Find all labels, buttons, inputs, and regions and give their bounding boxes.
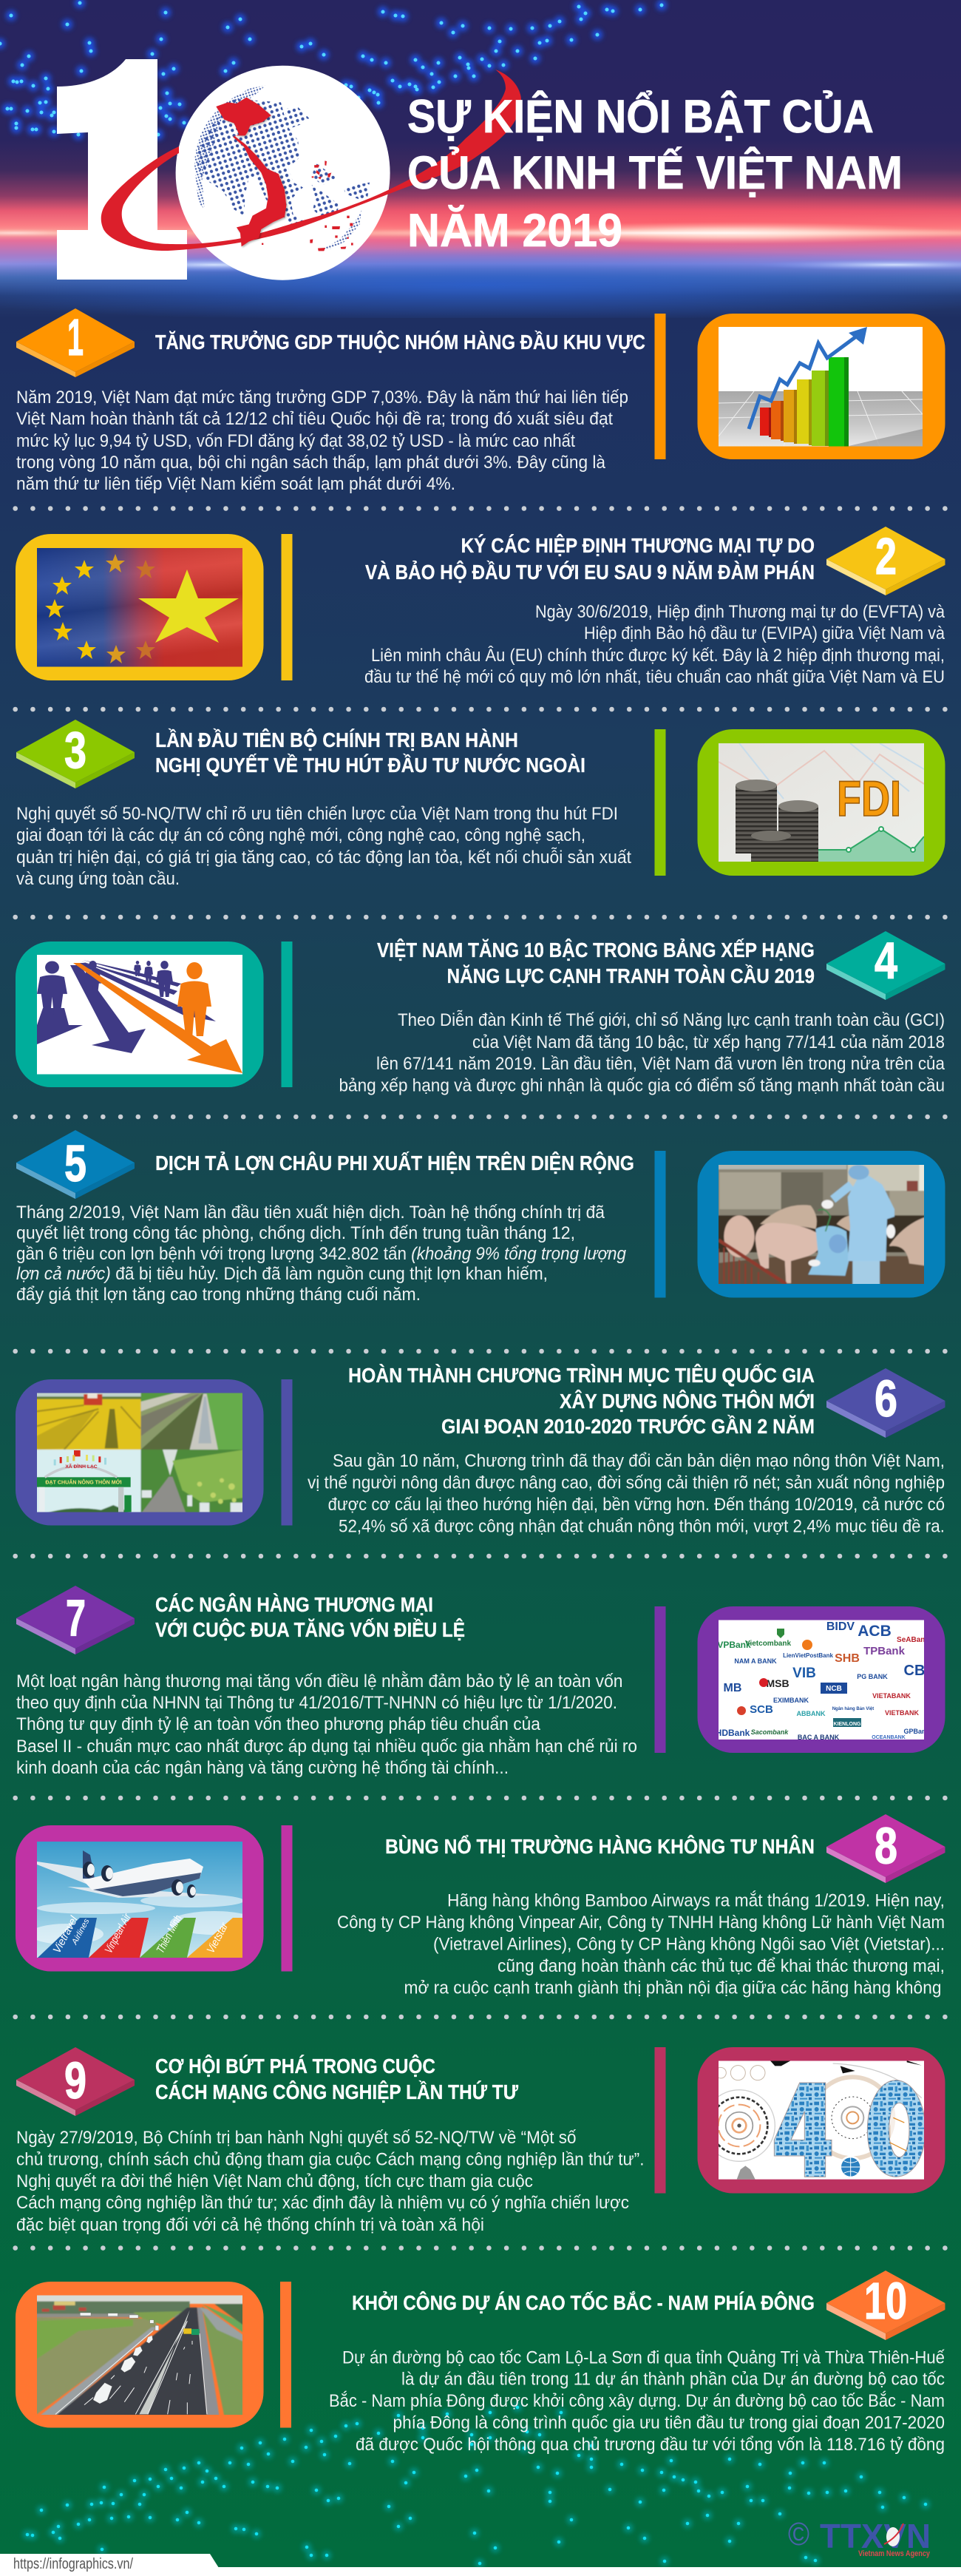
image card: bank logos: TPBank	[863, 1645, 906, 1657]
image card: bank logos: ACB	[858, 1623, 892, 1640]
image card: bank logos: NAM A BANK	[734, 1657, 777, 1665]
heading 7	[155, 1593, 465, 1641]
decoration: glowing blue dots top	[0, 3, 662, 135]
body text 8	[337, 1891, 945, 1998]
body text 9: Nghị quyết ra đời thể hiện Việt Nam chủ động, tích cực tham gia cuộc	[16, 2171, 533, 2191]
image card: growth chart	[698, 314, 945, 459]
image card: expressway	[16, 2282, 263, 2427]
body text 2	[364, 602, 945, 687]
big numeral 1	[57, 59, 187, 280]
heading 4: VIỆT NAM TĂNG 10 BẬC TRONG BẢNG XẾP HẠNG	[377, 938, 815, 961]
title: SỰ KIỆN NỔI BẬT CỦA	[407, 90, 874, 143]
badge 1: 1	[67, 308, 84, 366]
image card: bank logos: KIENLONG	[834, 1722, 861, 1727]
heading 4: NĂNG LỰC CẠNH TRANH TOÀN CẦU 2019	[446, 964, 815, 987]
image card: FDI coins: FDI	[837, 771, 901, 827]
header background	[0, 0, 961, 322]
body text 10	[329, 2347, 945, 2455]
body text 7: kinh doanh của các ngân hàng và tăng cường hệ thống tài chính...	[16, 1758, 509, 1778]
image card: rural development collage: ĐẠT CHUẨN NÔNG THÔN MỚI	[45, 1478, 122, 1485]
badge 2: 2	[875, 527, 897, 585]
heading 6: GIAI ĐOẠN 2010-2020 TRƯỚC GẦN 2 NĂM	[441, 1415, 815, 1438]
image card: arrows and people	[16, 942, 263, 1087]
image card: bank logos: Sacombank	[751, 1728, 789, 1736]
heading 6	[348, 1363, 815, 1438]
body text 1: năm thứ tư liên tiếp Việt Nam kiểm soát lạm phát dưới 4%.	[16, 474, 455, 494]
image card: airplane and tail fins: Vinpearl Air	[103, 1911, 134, 1955]
image card: bank logos: HDBank	[716, 1728, 750, 1738]
body text 5: gần 6 triệu con lợn bệnh với trọng lượng 342.802 tấn (khoảng 9% tổng trọng lượng	[16, 1244, 627, 1264]
heading 9	[155, 2054, 519, 2103]
badge 7	[16, 1586, 135, 1654]
body text 5: đẩy giá thịt lợn tăng cao trong những tháng cuối năm.	[16, 1285, 421, 1305]
badge 3	[16, 720, 135, 788]
heading 5: DỊCH TẢ LỢN CHÂU PHI XUẤT HIỆN TRÊN DIỆN RỘNG	[155, 1151, 634, 1174]
body text 9: Cách mạng công nghiệp lần thứ tư; xác định đây là nhiệm vụ có ý nghĩa chiến lược	[16, 2193, 629, 2213]
image card: rural development collage: XÃ ĐÌNH LẠC	[65, 1463, 98, 1470]
image card: bank logos: SHB	[835, 1652, 860, 1665]
heading 2: VÀ BẢO HỘ ĐẦU TƯ VỚI EU SAU 9 NĂM ĐÀM PHÁN	[365, 560, 815, 584]
heading 7: VỚI CUỘC ĐUA TĂNG VỐN ĐIỀU LỆ	[155, 1617, 465, 1641]
badge 4: 4	[875, 932, 897, 990]
decorative dotted separators	[16, 509, 948, 2248]
heading 7: CÁC NGÂN HÀNG THƯƠNG MẠI	[155, 1593, 433, 1616]
badge 4	[826, 931, 945, 1000]
badge 8	[826, 1814, 945, 1883]
image card: bank logos: SeABank	[897, 1636, 929, 1644]
image card: bank logos	[698, 1606, 945, 1753]
body text 1: Năm 2019, Việt Nam đạt mức tăng trưởng GDP 7,03%. Đây là năm thứ hai liên tiếp	[16, 388, 628, 408]
image card: airplane and tail fins	[16, 1825, 263, 1972]
badge 5	[16, 1130, 135, 1199]
image card: airplane and tail fins: Airlines	[70, 1917, 92, 1947]
heading 6: HOÀN THÀNH CHƯƠNG TRÌNH MỤC TIÊU QUỐC GIA	[348, 1363, 815, 1387]
red orbit swoosh	[101, 70, 521, 251]
badge 6: 6	[875, 1370, 897, 1427]
badge 8: 8	[875, 1816, 897, 1874]
badge 10	[826, 2271, 945, 2340]
body text 1: mức kỷ lục 9,94 tỷ USD, vốn FDI đăng ký đạt 38,02 tỷ USD - là mức cao nhất	[16, 431, 575, 451]
body text 1: trong vòng 10 năm qua, bội chi ngân sách thấp, lạm phát dưới 3%. Đây cũng là	[16, 453, 606, 473]
badge 5: 5	[64, 1135, 86, 1192]
body text 7	[16, 1671, 637, 1778]
panel: event 9 fourth industrial revolution	[16, 2047, 945, 2235]
heading 6: XÂY DỰNG NÔNG THÔN MỚI	[560, 1389, 815, 1413]
heading 4	[377, 938, 815, 987]
image card: bank logos: CB	[904, 1663, 925, 1679]
footer strip	[0, 2554, 961, 2576]
badge 9: 9	[64, 2052, 86, 2109]
body text 7: theo quy định của NHNN tại Thông tư 41/2016/TT-NHNN có hiệu lực từ 1/1/2020.	[16, 1693, 617, 1713]
logo: TTXVN Vietnam News Agency: ©	[788, 2516, 809, 2552]
image card: bank logos: LienVietPostBank	[783, 1652, 833, 1659]
image card: bank logos: VIB	[792, 1666, 816, 1681]
image card: airplane and tail fins: Vietstar	[205, 1920, 231, 1955]
body text 7: Một loạt ngân hàng thương mại tăng vốn điều lệ nhằm đảm bảo tỷ lệ an toàn vốn	[16, 1671, 622, 1691]
logo: TTXVN Vietnam News Agency: TTXVN	[820, 2517, 931, 2555]
body text 7: Thông tư quy định tỷ lệ an toàn vốn theo phương pháp tiêu chuẩn của	[16, 1714, 541, 1734]
body text 10: phía Đông là công trình quốc gia ưu tiên đầu tư trong giai đoạn 2017-2020	[393, 2413, 945, 2433]
globe as numeral 0	[176, 66, 390, 280]
body text 1	[16, 388, 628, 494]
badge 3: 3	[64, 721, 86, 779]
badge 2	[826, 527, 945, 595]
badge 6	[826, 1368, 945, 1438]
image card: bank logos: VIETBANK	[885, 1709, 919, 1717]
image card: airplane and tail fins: Thiên Minh	[154, 1913, 185, 1955]
panel: event 3 foreign investment resolution	[16, 720, 945, 889]
heading 9: CÁCH MẠNG CÔNG NGHIỆP LẦN THỨ TƯ	[155, 2080, 519, 2103]
image card: bank logos: VPBank	[717, 1640, 751, 1650]
title emblem: number 10 with globe	[57, 59, 521, 280]
badge 7: 7	[66, 1589, 86, 1646]
image card: bank logos: NCB	[826, 1685, 842, 1693]
body text 6	[308, 1451, 945, 1537]
image card: bank logos: MSB	[766, 1677, 789, 1689]
heading 8: BÙNG NỔ THỊ TRƯỜNG HÀNG KHÔNG TƯ NHÂN	[385, 1834, 815, 1858]
image card: bank logos: Ngân hàng Bản Việt	[832, 1707, 874, 1711]
image card: bank logos: BIDV	[826, 1620, 855, 1633]
body text 5: lợn cả nước) đã bị tiêu hủy. Dịch đã làm nguồn cung thịt lợn khan hiếm,	[16, 1264, 548, 1284]
image card: bank logos: ABBANK	[797, 1710, 826, 1717]
panel: event 10 North-South expressway	[16, 2271, 945, 2455]
body text 5: quyết liệt trong công tác phòng, chống dịch. Tính đến trung tuần tháng 12,	[16, 1223, 575, 1243]
image card: bank logos: VIETABANK	[872, 1692, 911, 1700]
body text 3: giai đoạn tới là các dự án có công nghệ mới, công nghệ cao, công nghệ sạch,	[16, 825, 585, 845]
title: CỦA KINH TẾ VIỆT NAM	[407, 146, 903, 199]
image card: FDI coins	[698, 729, 945, 876]
body text 5	[16, 1203, 627, 1305]
image card: veterinarians with pigs	[698, 1151, 945, 1297]
body text 4	[339, 1010, 945, 1096]
body text 3: Nghị quyết số 50-NQ/TW chỉ rõ ưu tiên chiến lược của Việt Nam trong thu hút FDI	[16, 804, 618, 824]
panel: event 5 African swine fever	[16, 1130, 945, 1305]
heading 2: KÝ CÁC HIỆP ĐỊNH THƯƠNG MẠI TỰ DO	[461, 534, 815, 557]
panel: event 8 private airlines	[16, 1814, 945, 1998]
image card: EU and Vietnam flags	[16, 534, 263, 680]
panel: event 1 GDP	[16, 308, 945, 494]
heading 1: TĂNG TRƯỞNG GDP THUỘC NHÓM HÀNG ĐẦU KHU VỰC	[155, 330, 645, 354]
image card: bank logos: SCB	[750, 1703, 773, 1716]
image card: bank logos: Vietcombank	[745, 1640, 791, 1648]
panel: event 6 new rural programme	[16, 1363, 945, 1537]
body text 9: chủ trương, chính sách chủ động tham gia cuộc Cách mạng công nghiệp lần thứ tư”.	[16, 2150, 645, 2170]
Vietnam map	[216, 98, 286, 246]
badge 9	[16, 2047, 135, 2116]
image card: bank logos: EXIMBANK	[773, 1697, 809, 1704]
panel: event 4 competitiveness ranking	[16, 931, 945, 1096]
image card: bank logos: OCEANBANK	[872, 1735, 906, 1740]
heading 3	[155, 728, 585, 777]
panel: event 2 EU trade agreements	[16, 527, 945, 687]
image card: bank logos: MB	[724, 1682, 741, 1694]
badge 1	[16, 308, 135, 377]
body text 8: Hãng hàng không Bamboo Airways ra mắt tháng 1/2019. Hiện nay,	[447, 1891, 945, 1911]
heading 10: KHỞI CÔNG DỰ ÁN CAO TỐC BẮC - NAM PHÍA ĐÔNG	[352, 2291, 815, 2314]
title: NĂM 2019	[407, 205, 622, 257]
title	[407, 90, 903, 257]
image card: rural development collage	[16, 1379, 263, 1525]
body text 9: đặc biệt quan trọng đối với cả hệ thống chính trị và toàn xã hội	[16, 2215, 484, 2235]
body text 7: Basel II - chuẩn mực cao nhất được áp dụng tại nhiều quốc gia nhằm hạn chế rủi ro	[16, 1737, 637, 1757]
image card: airplane and tail fins: Vietravel	[51, 1914, 81, 1955]
body text 3: và cung ứng toàn cầu.	[16, 869, 180, 889]
heading 9: CƠ HỘI BỨT PHÁ TRONG CUỘC	[155, 2054, 435, 2078]
image card: bank logos: GPBank	[903, 1728, 930, 1735]
body text 8: mở ra cuộc cạnh tranh giành thị phần nội địa giữa các hãng hàng không	[404, 1978, 942, 1998]
panel: event 7 commercial banks	[16, 1586, 945, 1778]
image card: industry 4.0	[698, 2047, 945, 2194]
body text 5: Tháng 2/2019, Việt Nam lần đầu tiên xuất hiện dịch. Toàn hệ thống chính trị đã	[16, 1203, 605, 1223]
heading 3: LẦN ĐẦU TIÊN BỘ CHÍNH TRỊ BAN HÀNH	[155, 728, 518, 751]
body text 3	[16, 804, 631, 889]
heading 3: NGHỊ QUYẾT VỀ THU HÚT ĐẦU TƯ NƯỚC NGOÀI	[155, 754, 585, 777]
body text 9	[16, 2128, 645, 2235]
image card: bank logos: BAC A BANK	[798, 1734, 840, 1741]
body text 8: cũng đang hoàn thành các thủ tục để khai thác thương mại,	[498, 1956, 945, 1976]
source url: https://infographics.vn/	[13, 2556, 133, 2572]
body text 1: Việt Nam hoàn thành tất cả 12/12 chỉ tiêu Quốc hội đề ra; trong đó xuất siêu đạt	[16, 409, 613, 429]
heading 2	[365, 534, 815, 584]
body text 3: quản trị hiện đại, có giá trị gia tăng cao, có tác động lan tỏa, kết nối chuỗi sản xuất	[16, 848, 631, 868]
decoration: glowing cyan dots bottom	[27, 2407, 926, 2563]
logo: TTXVN Vietnam News Agency: Vietnam News Agency	[858, 2549, 931, 2558]
badge 10: 10	[864, 2272, 907, 2330]
image card: bank logos: PG BANK	[857, 1673, 888, 1680]
body text 9: Ngày 27/9/2019, Bộ Chính trị ban hành Nghị quyết số 52-NQ/TW về “Một số	[16, 2128, 577, 2148]
